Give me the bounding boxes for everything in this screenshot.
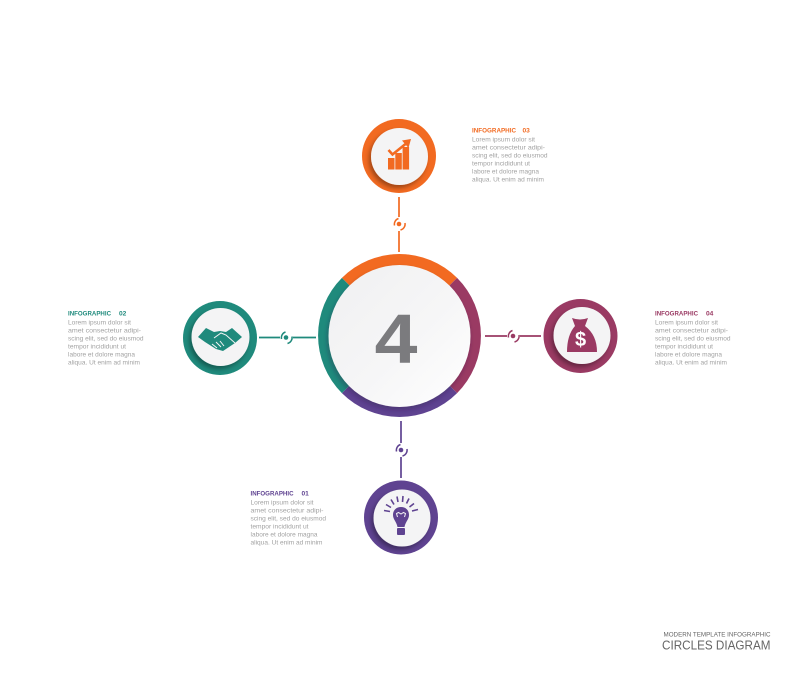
white disc	[192, 308, 250, 366]
heading: 04	[706, 310, 714, 317]
body copy: tempor incididunt ut	[68, 343, 126, 350]
body copy	[250, 499, 326, 546]
heading: INFOGRAPHIC	[250, 490, 294, 497]
icon: handshake	[198, 328, 242, 351]
text block: infographic 04	[655, 310, 731, 366]
outer ring	[362, 119, 436, 193]
ring segment: purple	[342, 336, 457, 417]
body copy	[472, 136, 548, 183]
central circle	[318, 254, 481, 417]
body copy: scing elit, sed do eiusmod	[655, 335, 731, 342]
white disc	[374, 490, 430, 546]
heading: INFOGRAPHIC	[68, 310, 111, 317]
body copy: amet consectetur adipi-	[68, 327, 141, 334]
footer title: CIRCLES DIAGRAM	[662, 639, 770, 653]
body copy: labore et dolore magna	[655, 351, 722, 358]
icon: money bag: $	[575, 329, 586, 351]
icon: light bulb	[384, 496, 418, 535]
white disc	[371, 128, 428, 185]
body copy: Lorem ipsum dolor sit	[472, 136, 535, 143]
footer caption	[662, 632, 771, 653]
body copy	[68, 319, 144, 366]
body copy: amet consectetur adipi-	[250, 507, 324, 514]
body copy: Lorem ipsum dolor sit	[655, 319, 718, 326]
heading: 02	[119, 310, 127, 317]
text block: infographic 01	[250, 490, 326, 546]
body copy: tempor incididunt ut	[472, 160, 530, 167]
body copy: aliqua. Ut enim ad minim	[68, 359, 140, 366]
body copy: amet consectetur adipi-	[655, 327, 728, 334]
ring segment: teal	[318, 278, 400, 393]
central white disc	[328, 265, 470, 407]
connector: bottom	[396, 421, 407, 478]
ring segment: orange	[342, 254, 457, 336]
ring segment: plum	[400, 278, 481, 393]
connector: left	[259, 332, 316, 344]
outer ring	[183, 301, 257, 375]
body copy: aliqua. Ut enim ad minim	[250, 539, 323, 546]
body copy: scing elit, sed do eiusmod	[68, 335, 144, 342]
connector: top	[394, 197, 405, 252]
node: bottom purple light bulb	[364, 480, 438, 554]
heading: INFOGRAPHIC	[655, 310, 698, 317]
connector: right	[485, 330, 541, 342]
body copy: Lorem ipsum dolor sit	[68, 319, 131, 326]
heading: INFOGRAPHIC	[472, 127, 516, 134]
body copy: labore et dolore magna	[68, 351, 135, 358]
body copy: scing elit, sed do eiusmod	[250, 515, 326, 522]
footer subtitle: MODERN TEMPLATE INFOGRAPHIC	[664, 632, 771, 638]
node: right plum money bag	[544, 299, 618, 373]
body copy: tempor incididunt ut	[250, 523, 309, 530]
body copy: scing elit, sed do eiusmod	[472, 152, 548, 159]
outer ring	[544, 299, 618, 373]
body copy	[655, 319, 731, 366]
body copy: labore et dolore magna	[472, 168, 539, 175]
node: left teal handshake	[183, 301, 257, 375]
outer ring	[364, 480, 438, 554]
body copy: labore et dolore magna	[250, 531, 318, 538]
node: top orange chart	[362, 119, 436, 193]
body copy: aliqua. Ut enim ad minim	[472, 176, 544, 183]
heading: 01	[302, 490, 309, 497]
body copy: aliqua. Ut enim ad minim	[655, 359, 727, 366]
body copy: tempor incididunt ut	[655, 343, 713, 350]
text block: infographic 02	[68, 310, 144, 366]
text block: infographic 03	[472, 127, 548, 183]
white disc	[554, 307, 610, 364]
body copy: Lorem ipsum dolor sit	[250, 499, 314, 506]
body copy: amet consectetur adipi-	[472, 144, 545, 151]
heading: 03	[522, 127, 530, 134]
icon: rising bar chart	[388, 139, 411, 170]
number 4: 4	[375, 299, 417, 378]
